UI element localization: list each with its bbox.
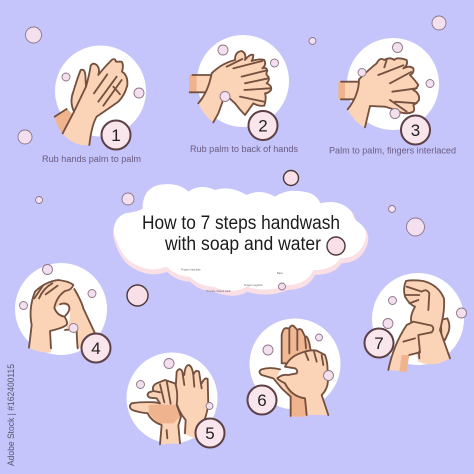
- hands: [130, 365, 208, 444]
- title: How to 7 steps handwash: [142, 213, 340, 234]
- bubble top of cloud: [284, 170, 298, 186]
- hands: [259, 326, 328, 417]
- bubble on cloud: [327, 237, 345, 255]
- bubble: [20, 302, 28, 310]
- step 5: [126, 352, 224, 448]
- caption: Palm to palm, fingers interlaced: [329, 146, 456, 156]
- bubble: [206, 402, 213, 410]
- number badge 2: 2: [258, 116, 268, 136]
- cloud shadow: [115, 187, 367, 294]
- number badge 3: 3: [411, 121, 420, 140]
- bubble below cloud: [127, 285, 148, 306]
- step 3: [329, 38, 456, 156]
- hands: [189, 51, 271, 122]
- cloud panel: [114, 184, 367, 294]
- bubble: [426, 80, 434, 88]
- bubble: [316, 334, 322, 341]
- number badge 7: 7: [374, 334, 384, 353]
- step 4: [15, 263, 110, 362]
- cloud body: [114, 184, 366, 291]
- number badge 4: 4: [91, 339, 101, 358]
- tiny labels: Thumbs rotated wash: [206, 289, 231, 293]
- white circle: [372, 273, 464, 365]
- decorative bubbles: [18, 16, 446, 236]
- step 1: [42, 46, 146, 164]
- step 7: [364, 273, 466, 372]
- watermark credit: Adobe Stock | #162400115: [6, 364, 17, 466]
- bubble: [270, 59, 278, 67]
- hands: [338, 58, 419, 127]
- white circle: [197, 35, 289, 127]
- number badge 1: 1: [111, 126, 121, 145]
- bubble: [383, 318, 393, 328]
- hands: [29, 280, 95, 352]
- bubble: [136, 380, 144, 388]
- hands: [55, 59, 127, 145]
- bubble: [62, 73, 70, 81]
- white circle: [55, 46, 146, 136]
- number badge 5: 5: [205, 424, 215, 443]
- step 2: [189, 35, 298, 154]
- bubble: [42, 264, 52, 274]
- title line 2: with soap and water: [164, 234, 322, 255]
- caption: Rub hands palm to palm: [42, 154, 141, 164]
- bubble: [456, 308, 466, 318]
- bubble: [324, 370, 334, 380]
- caption: Rub palm to back of hands: [190, 144, 298, 154]
- step 6: [248, 318, 340, 417]
- bubble: [388, 296, 396, 304]
- bubble: [69, 324, 78, 332]
- bubble: [220, 92, 230, 102]
- bubble: [390, 108, 400, 118]
- bubble: [134, 88, 144, 98]
- white circle: [126, 352, 218, 444]
- tiny labels: Fingers backside: [181, 268, 201, 272]
- white circle: [347, 38, 439, 130]
- bubble: [358, 68, 366, 76]
- white circle: [15, 263, 107, 355]
- number badge 6: 6: [257, 391, 267, 410]
- tiny labels: Fingers together: [244, 283, 263, 287]
- bubble: [88, 290, 96, 298]
- tiny labels: [181, 268, 283, 293]
- bubble: [164, 358, 174, 368]
- tiny labels: Base: [277, 271, 283, 275]
- hands: [388, 280, 450, 372]
- white circle: [250, 318, 340, 410]
- bubble: [392, 42, 402, 52]
- bubble: [218, 45, 228, 55]
- bubble: [263, 345, 273, 355]
